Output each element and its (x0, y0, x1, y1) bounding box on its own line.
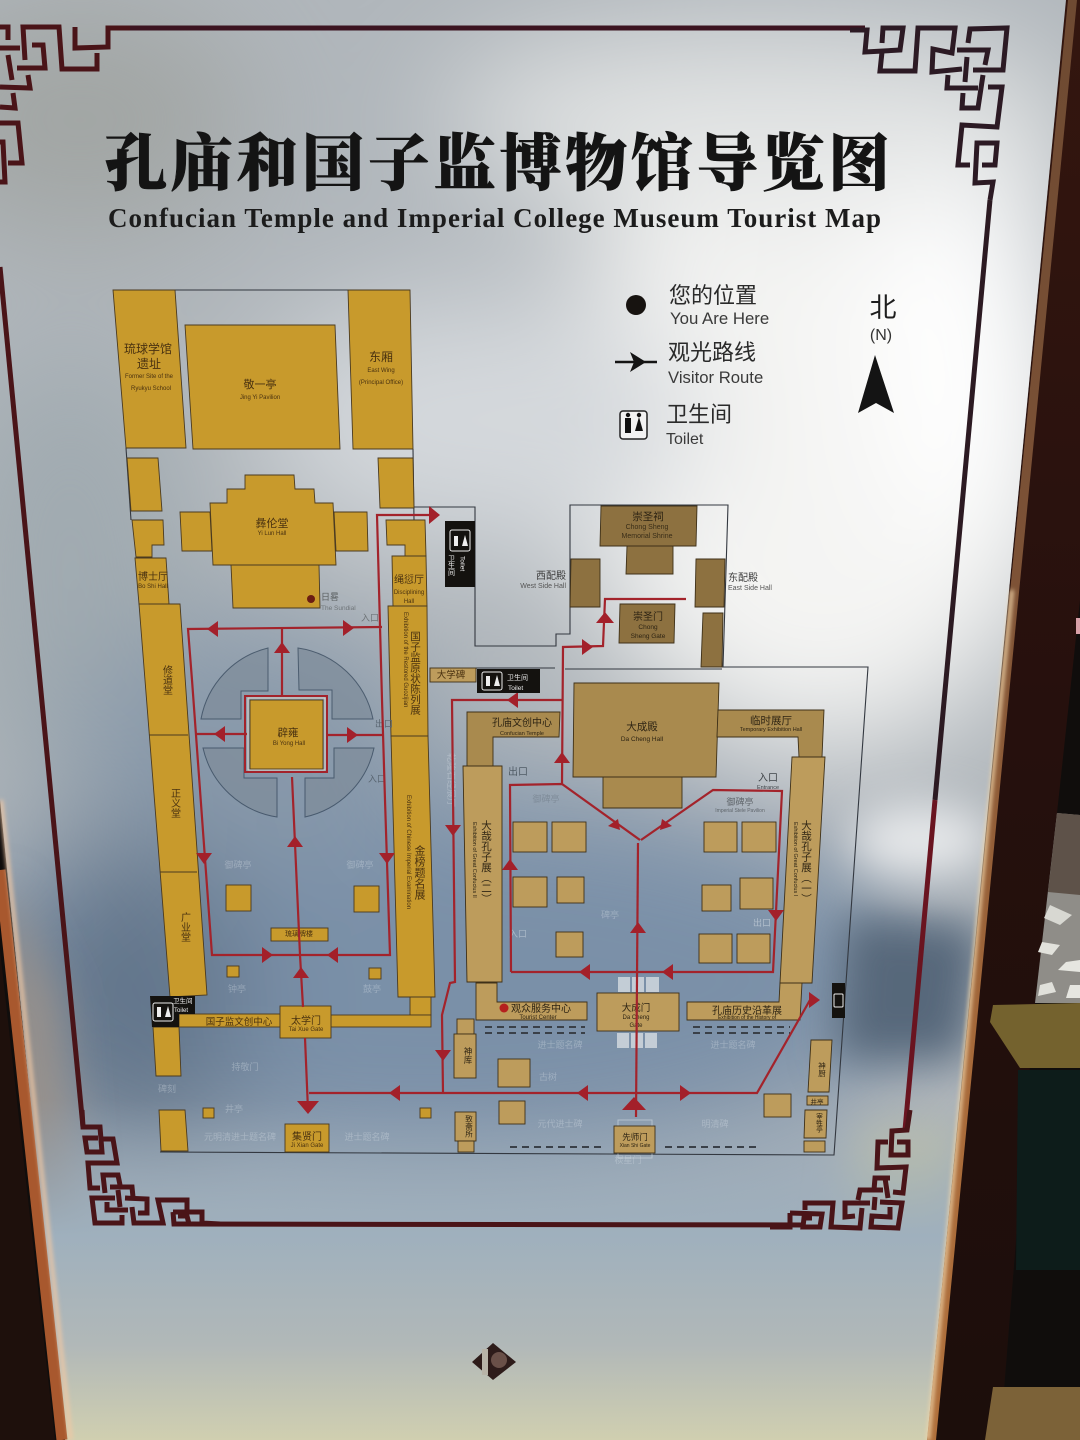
building: Ryukyu School: Former Site of the (125, 374, 174, 380)
building: Confucian Temple Cultural Center (467, 712, 560, 766)
legend: you are here (626, 283, 769, 328)
exhibition: History of Temple: 孔庙历史沿革展 (712, 1004, 782, 1017)
legend (615, 283, 896, 448)
building: Disciplining Hall: Hall (404, 599, 414, 605)
exhibition: Restored Guozijian: 国子监原状陈列展 (409, 631, 421, 716)
Bi Yong hall and circular pool: 辟雍 (278, 726, 299, 739)
faint labels on glass: 御碑亭 (726, 796, 754, 807)
legend: you are here: You Are Here (670, 309, 769, 328)
building: Chong Sheng Gate: Chong (638, 624, 658, 631)
toilet sign: south-west: 卫生间 (173, 996, 192, 1005)
building: West Side Hall: 西配殿 (536, 570, 566, 582)
building: cultural shop strip and Tai Xue Gate: 国子监文创中心 (206, 1016, 273, 1028)
building: East Side Hall: 东配殿 (728, 571, 758, 584)
entrance and exit labels: 出口 (508, 765, 528, 778)
building: West Side Hall: West Side Hall (520, 583, 566, 590)
toilet sign: by Da Cheng Hall: 卫生间 (507, 673, 528, 682)
faint labels on glass: 元明清进士题名碑 (204, 1131, 276, 1142)
legend: toilet (620, 402, 732, 448)
building: Zhi Zhai Suo (455, 1112, 476, 1152)
toilet sign: north-east of college (445, 521, 475, 587)
faint labels on glass: 御碑亭 (346, 859, 374, 870)
faint labels on glass: 乾隆石经展厅 (446, 753, 457, 807)
exhibition: Restored Guozijian: Exhibition of the Restored Guozijian (402, 612, 408, 707)
exhibition: Great Confucius I: 大哉孔子展（一） (800, 819, 812, 904)
building: Ryukyu School (113, 290, 186, 448)
sundial (307, 592, 356, 612)
entrance and exit labels: 入口 (361, 613, 379, 623)
title: Chinese: 孔庙和国子监博物馆导览图 (105, 114, 890, 203)
building: Jing Yi Pavilion (185, 325, 340, 449)
title: English: Confucian Temple and Imperial College Museum Tourist Map (108, 203, 881, 233)
faint labels on glass: 钟亭 (228, 983, 246, 994)
exhibition: Imperial Examination: Exhibition of Chinese Imperial Examination (405, 795, 411, 909)
exhibition: Great Confucius I (780, 757, 825, 983)
exhibition: Great Confucius I: Exhibition of Great Confucius I (792, 822, 798, 897)
stele pavilion label: Da Xue Bei (430, 668, 476, 682)
faint labels on glass: 碑刻 (158, 1083, 176, 1094)
corner ornament: bottom-left (82, 1110, 220, 1224)
west halls strip: 修道堂 (160, 664, 172, 695)
building: Chong Sheng Memorial Shrine: Memorial Shrine (622, 533, 673, 540)
legend: visitor route (615, 340, 763, 387)
east strip building (701, 613, 723, 667)
entrance and exit labels (361, 613, 779, 939)
legend: toilet: Toilet (666, 431, 704, 448)
left corner of glass: dark wedge (0, 950, 55, 1440)
lit panel edge right (927, 0, 1077, 1440)
faint labels on glass (158, 753, 765, 1165)
dark wooden frame right (927, 0, 1080, 1440)
building: Da Cheng Gate: 大成门 (622, 1002, 650, 1014)
toilet sign: south-west: Toilet (174, 1008, 188, 1014)
entrance and exit labels: 出口 (375, 718, 393, 729)
corner ornament: top-left (0, 27, 130, 182)
building: East Side Hall (695, 559, 772, 607)
building: Chong Sheng Memorial Shrine: 崇圣祠 (632, 510, 664, 523)
building: cultural shop strip and Tai Xue Gate: 太学门 (291, 1014, 321, 1027)
legend: visitor route: Visitor Route (668, 368, 763, 387)
route arrowheads (196, 506, 820, 1114)
exhibition: Imperial Examination (391, 736, 435, 997)
toilet sign: by Da Cheng Hall: Toilet (508, 685, 523, 692)
building: Bo Shi Hall (135, 558, 169, 604)
exhibition: Imperial Examination: 金榜题名展 (413, 844, 426, 901)
visitor route lines (188, 515, 815, 1117)
north arrow: (N) (870, 327, 892, 344)
east auxiliary buildings: 井亭 (810, 1097, 824, 1106)
building: Ryukyu School: 琉球学馆 (124, 341, 172, 356)
toilet sign: north-east of college: Toilet (458, 556, 466, 571)
faint labels on glass: 明清碑 (701, 1118, 729, 1129)
building: Bo Shi Hall: Bo Shi Hall (138, 584, 168, 590)
west halls strip (139, 604, 207, 997)
building: Ji Xian Gate (285, 1124, 329, 1152)
building: Yi Lun Hall: Yi Lun Hall (258, 531, 286, 537)
building: Bo Shi Hall: 博士厅 (138, 570, 168, 583)
exhibition: Great Confucius II (463, 766, 502, 982)
faint labels on glass: 棂星门 (614, 1154, 642, 1165)
building: Da Cheng Hall: 大成殿 (626, 720, 658, 733)
building: Disciplining Hall: 绳愆厅 (394, 573, 424, 586)
building: Xian Shi Gate (614, 1120, 655, 1158)
building: Jing Yi Pavilion: 敬一亭 (244, 377, 276, 391)
pavilions and arch (203, 885, 431, 1118)
east auxiliary buildings (804, 1040, 832, 1152)
building: Chong Sheng Memorial Shrine (600, 506, 697, 574)
building: Chong Sheng Gate (619, 604, 675, 643)
building: East Side Hall: East Side Hall (728, 585, 772, 592)
north arrow (858, 293, 896, 413)
site map (113, 290, 868, 1165)
ornamental border frame (0, 27, 1007, 1228)
toilet sign: south-west (150, 996, 195, 1027)
lit panel edge left (0, 800, 71, 1440)
building: Temporary Exhibition Hall: Temporary Exhibition Hall (740, 727, 802, 733)
building: Chong Sheng Memorial Shrine: Chong Sheng (626, 524, 669, 531)
legend: you are here: 您的位置 (669, 283, 757, 308)
north arrow: 北 (870, 293, 896, 323)
exhibition: History of Temple: Exhibition of the History of (718, 1015, 777, 1021)
stele pavilion label: Da Xue Bei: 大学碑 (437, 669, 466, 681)
building: East Wing: (Principal Office) (359, 380, 403, 386)
steps and forecourt stelae (617, 977, 659, 1048)
west halls strip: 正义堂 (168, 788, 180, 818)
entrance and exit labels: 入口 (368, 774, 386, 784)
small side buildings (127, 458, 426, 557)
entrance and exit labels: 入口 (509, 929, 527, 939)
faint labels on glass: 进士题名碑 (344, 1131, 390, 1142)
building: Storage for Sacrifice (454, 1019, 476, 1078)
faint labels on glass: 井亭 (225, 1103, 243, 1114)
imperial college buildings (113, 290, 435, 1152)
corner ornament: top-right (850, 28, 1007, 200)
building: Tourist Center (476, 983, 587, 1021)
toilet sign: north-east of college: 卫生间 (448, 555, 455, 577)
sundial: 日晷 (321, 592, 339, 602)
building: Jing Yi Pavilion: Jing Yi Pavilion (240, 395, 280, 401)
building: Disciplining Hall: Disciplining (394, 590, 424, 596)
building: Confucian Temple Cultural Center: 孔庙文创中心 (492, 716, 552, 729)
building: Yi Lun Hall (180, 475, 368, 608)
building: Chong Sheng Gate: 崇圣门 (633, 610, 663, 623)
building: Disciplining Hall (392, 556, 427, 606)
building: Xian Shi Gate: Xian Shi Gate (620, 1143, 651, 1149)
faint labels on glass: 进士题名碑 (537, 1039, 583, 1050)
entrance and exit labels: 入口 (758, 773, 778, 784)
building: Temporary Exhibition Hall: 临时展厅 (750, 714, 792, 727)
building: Xian Shi Gate: 先师门 (622, 1132, 648, 1142)
building: Da Cheng Hall (573, 683, 719, 808)
exhibition: History of Temple (687, 983, 802, 1021)
faint labels on glass: 元代进士碑 (537, 1118, 583, 1129)
entrance and exit labels: Entrance (757, 785, 779, 791)
building: Da Cheng Gate: Da Cheng (622, 1015, 650, 1021)
map outline walls (113, 290, 868, 1155)
building: Ji Xian Gate: Ji Xian Gate (291, 1143, 324, 1149)
Bi Yong hall and circular pool: Bi Yong Hall (273, 741, 305, 747)
building: Chong Sheng Gate: Sheng Gate (631, 633, 666, 640)
building: Da Cheng Gate (597, 993, 679, 1031)
building: Ryukyu School: Ryukyu School (131, 386, 171, 392)
faint labels on glass: 鼓亭 (363, 983, 381, 994)
building: Tourist Center: Tourist Center (519, 1015, 557, 1021)
museum logo (472, 1343, 516, 1380)
faint labels on glass: 古树 (539, 1071, 557, 1082)
exhibition: Restored Guozijian (388, 606, 428, 736)
exhibition: Great Confucius II: 大哉孔子展（二） (480, 819, 492, 904)
toilet sign: by Da Cheng Hall (477, 669, 540, 693)
background objects beyond the frame (985, 618, 1080, 1440)
building: Tourist Center: 观众服务中心 (511, 1002, 571, 1015)
building: cultural shop strip and Tai Xue Gate (179, 997, 431, 1038)
building: West Side Hall (520, 559, 600, 607)
toilet sign: east (832, 983, 845, 1018)
building: Da Cheng Hall: Da Cheng Hall (621, 736, 664, 743)
building: Da Cheng Gate: Gate (629, 1023, 643, 1029)
entrance and exit labels: 出口 (753, 917, 771, 928)
building: Ryukyu School: 遗址 (137, 357, 161, 371)
building: East Wing: East Wing (367, 368, 395, 374)
building: Yi Lun Hall: 彝伦堂 (256, 516, 288, 530)
legend: visitor route: 观光路线 (668, 340, 756, 365)
corner ornament: bottom-right (770, 1110, 910, 1228)
legend: toilet: 卫生间 (666, 402, 732, 427)
building: Zhi Zhai Suo: 致斋所 (464, 1114, 474, 1139)
faint labels on glass: 进士题名碑 (710, 1039, 756, 1050)
building: Ji Xian Gate: 集贤门 (292, 1130, 322, 1143)
confucian temple buildings (430, 506, 832, 1158)
building: Temporary Exhibition Hall (717, 710, 824, 757)
faint labels on glass: 御碑亭 (532, 793, 560, 804)
faint labels on glass: 持敬门 (231, 1061, 259, 1072)
sundial: The Sundial (321, 605, 356, 612)
building: cultural shop strip and Tai Xue Gate: Tai Xue Gate (289, 1027, 324, 1033)
east auxiliary buildings: 宰牲亭 (814, 1112, 823, 1133)
stele pavilions courtyard (498, 822, 791, 1124)
building: Storage for Sacrifice: 神库 (463, 1046, 473, 1065)
exhibition: Great Confucius II: Exhibition of Great Confucius II (471, 822, 477, 898)
faint labels on glass: 御碑亭 (224, 859, 252, 870)
west halls strip: 广业堂 (178, 912, 190, 942)
building: Confucian Temple Cultural Center: Confucian Temple (500, 731, 544, 737)
pavilions and arch: 琉璃牌楼 (285, 929, 313, 938)
dashed stele rows (485, 1027, 790, 1147)
faint labels on glass: 碑亭 (601, 909, 619, 920)
building: East Wing (348, 290, 413, 449)
faint labels on glass: Imperial Stele Pavilion (715, 808, 765, 814)
Bi Yong hall and circular pool (201, 648, 374, 817)
east auxiliary buildings: 神厨 (817, 1061, 826, 1077)
building: East Wing: 东厢 (369, 350, 393, 364)
south-west buildings (153, 1027, 188, 1151)
